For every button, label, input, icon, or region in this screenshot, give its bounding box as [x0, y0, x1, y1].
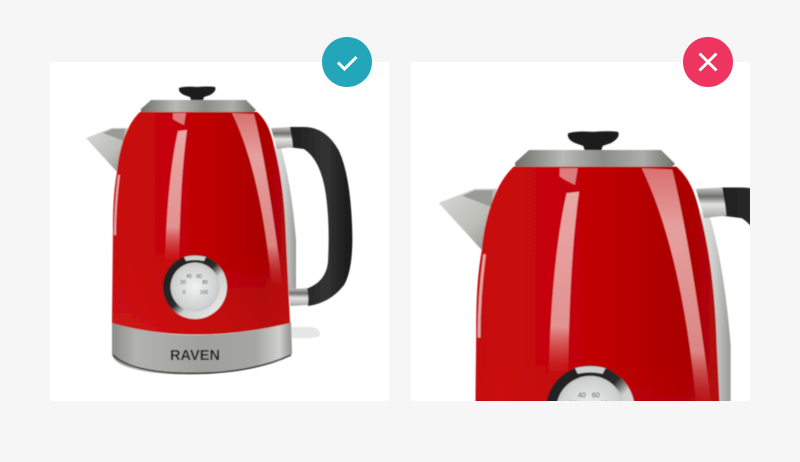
edge highlight	[114, 175, 120, 235]
panel: incorrect framing	[411, 37, 750, 401]
brand name: RAVEN	[170, 348, 220, 364]
dial top chrome	[184, 256, 206, 261]
base rim	[113, 355, 291, 373]
panel: correct framing	[50, 37, 389, 401]
badge: cross mark	[683, 37, 733, 87]
dial numbers: 100	[200, 290, 208, 296]
base plate	[287, 327, 320, 338]
water window	[700, 213, 731, 422]
dial ring	[163, 255, 227, 319]
badge circle	[322, 37, 372, 87]
body	[474, 166, 720, 401]
dial face	[561, 379, 620, 401]
handle	[720, 186, 750, 226]
kettle: cropped close-up	[438, 130, 750, 401]
top reflection	[173, 113, 186, 125]
dial numbers	[570, 392, 608, 401]
handle top bracket	[696, 188, 726, 218]
spout highlight	[103, 129, 125, 141]
top reflection	[560, 168, 578, 185]
lower bright reflection	[475, 361, 718, 401]
dial inner ring	[170, 262, 220, 312]
handle	[288, 127, 352, 306]
base	[112, 322, 292, 374]
temperature dial	[546, 364, 635, 401]
right highlight	[232, 113, 283, 290]
temperature dial	[163, 255, 227, 319]
spout highlight	[462, 190, 493, 207]
handle top bracket	[271, 127, 293, 149]
right highlight	[642, 168, 713, 414]
dial numbers: 60	[196, 274, 202, 280]
main highlight	[165, 130, 187, 266]
lid	[515, 150, 675, 167]
dial numbers: 0	[183, 290, 186, 296]
knob	[179, 86, 215, 100]
check icon	[338, 57, 356, 69]
dial numbers: 80	[600, 401, 608, 408]
badge: check mark	[322, 37, 372, 87]
knob	[568, 131, 619, 150]
handle lower bracket	[289, 288, 308, 306]
dial inner ring	[556, 375, 620, 401]
lower bright reflection	[112, 252, 290, 334]
dial numbers	[180, 274, 208, 296]
lid	[141, 100, 256, 112]
dial numbers: 40	[186, 274, 192, 280]
water window	[274, 145, 296, 296]
dial face	[172, 264, 218, 310]
infographic: kettle framing comparison	[50, 37, 750, 401]
panel background: incorrect	[411, 62, 750, 401]
spout	[439, 189, 497, 250]
dial numbers: 20	[570, 401, 578, 408]
body shading	[475, 168, 718, 401]
badge circle	[683, 37, 733, 87]
dial ring	[546, 364, 635, 401]
dial numbers: 20	[180, 280, 186, 286]
main highlight	[549, 192, 579, 381]
panel background: correct	[50, 62, 389, 401]
edge highlight	[478, 254, 486, 338]
spout	[86, 128, 128, 172]
dial numbers: 80	[202, 280, 208, 286]
cross icon	[700, 54, 716, 70]
dial numbers: 40	[578, 392, 586, 399]
kettle: full product in frame	[86, 86, 352, 374]
body shading	[108, 113, 296, 340]
dial numbers: 60	[592, 392, 600, 399]
body	[112, 112, 290, 334]
dial top chrome	[575, 366, 606, 374]
